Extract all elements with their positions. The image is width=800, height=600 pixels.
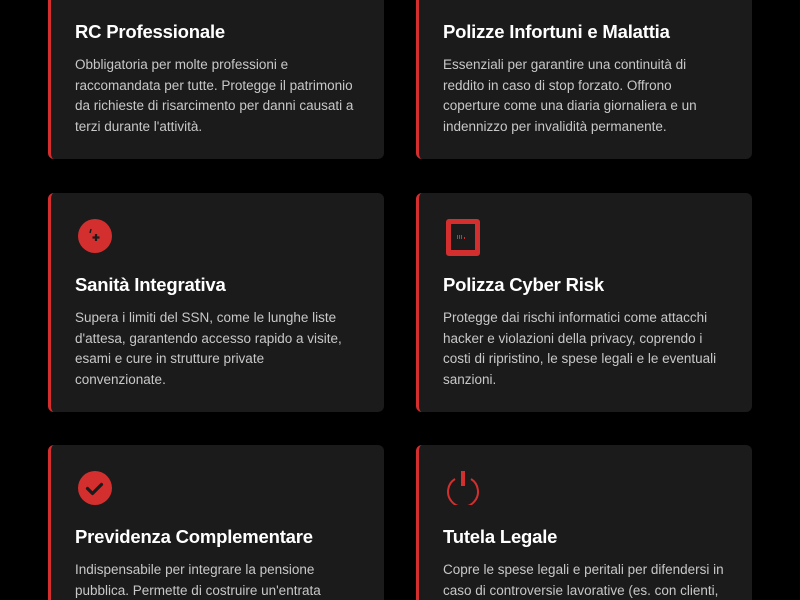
text: Obbligatoria per molte professioni e	[75, 57, 288, 72]
heading: Polizza Cyber Risk	[443, 274, 604, 295]
text: Supera i limiti del SSN, come le lunghe liste	[75, 310, 336, 325]
icon: power	[447, 471, 479, 505]
text: coperture come una diaria giornaliera e un	[443, 98, 697, 113]
text	[75, 57, 354, 134]
text: Copre le spese legali e peritali per difendersi in	[443, 562, 724, 577]
heading: Polizze Infortuni e Malattia	[443, 21, 670, 42]
text	[443, 562, 724, 598]
text: Protegge dai rischi informatici come attacchi	[443, 310, 707, 325]
card: Cyber Risk	[416, 193, 752, 412]
card: RC Professionale	[48, 0, 384, 159]
text: sanzioni.	[443, 372, 496, 387]
text: Essenziali per garantire una continuità di	[443, 57, 686, 72]
text: d'attesa, garantendo accesso rapido a visite,	[75, 331, 342, 346]
text	[75, 310, 342, 387]
text	[443, 310, 716, 387]
heading: Sanità Integrativa	[75, 274, 226, 295]
icon: check	[78, 471, 112, 505]
text: reddito in caso di stop forzato. Offrono	[443, 78, 672, 93]
icon: cyber	[446, 219, 480, 256]
text: costi di ripristino, le spese legali e le eventuali	[443, 351, 716, 366]
card: Tutela Legale	[416, 445, 752, 600]
text: raccomandata per tutte. Protegge il patrimonio	[75, 78, 353, 93]
text: Indispensabile per integrare la pensione	[75, 562, 314, 577]
text: indennizzo per invalidità permanente.	[443, 119, 667, 134]
text	[75, 562, 321, 598]
text: terzi durante l'attività.	[75, 119, 202, 134]
heading: Tutela Legale	[443, 526, 557, 547]
text: pubblica. Permette di costruire un'entrata	[75, 583, 321, 598]
text: caso di controversie lavorative (es. con clienti,	[443, 583, 718, 598]
card: Previdenza Complementare	[48, 445, 384, 600]
icon: health	[78, 219, 112, 253]
card: Sanità Integrativa	[48, 193, 384, 412]
card: Polizze Infortuni	[416, 0, 752, 159]
text	[443, 57, 697, 134]
heading: Previdenza Complementare	[75, 526, 313, 547]
text: da richieste di risarcimento per danni causati a	[75, 98, 353, 113]
heading: RC Professionale	[75, 21, 225, 42]
text: convenzionate.	[75, 372, 166, 387]
text: esami e cure in strutture private	[75, 351, 264, 366]
text: hacker e violazioni della privacy, coprendo i	[443, 331, 702, 346]
